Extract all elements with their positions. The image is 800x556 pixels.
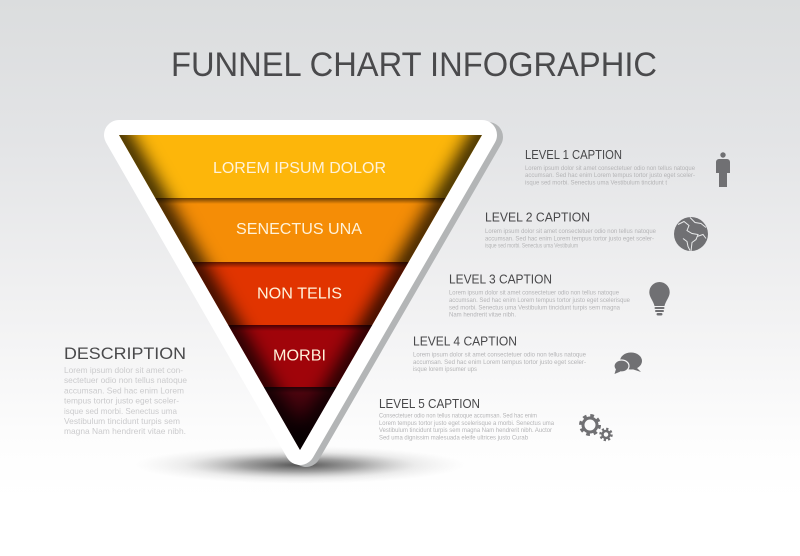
- description block: tempus tortor justo eget sceler-: [64, 396, 179, 406]
- description block: [64, 345, 187, 436]
- level 1 caption: LEVEL 1 CAPTION: [525, 148, 622, 162]
- level 3 caption: sed morbi. Senectus uma Vestibulum tincidunt turpis sem magna: [449, 305, 621, 311]
- level 1 caption: isque sed morbi. Senectus uma Vestibulum tincidunt t: [525, 180, 667, 186]
- level 5 caption: [379, 397, 555, 442]
- ground shadow: [135, 446, 465, 484]
- level 4 caption: LEVEL 4 CAPTION: [413, 334, 517, 348]
- band 4: [228, 325, 372, 387]
- level 1 caption: [525, 148, 696, 186]
- level 3 caption: LEVEL 3 CAPTION: [449, 272, 552, 286]
- band 5: [264, 387, 336, 450]
- description block: sectetuer odio non tellus natoque: [64, 375, 187, 385]
- level 4 caption: accumsan. Sed hac enim Lorem tempus tortor justo eget sceler-: [413, 360, 586, 366]
- band labels: NON TELIS: [257, 286, 342, 302]
- funnel white frame: [119, 135, 482, 450]
- funnel chart: [100, 102, 501, 452]
- level 1 caption: accumsan. Sed hac enim Lorem tempus tortor justo eget sceler-: [525, 173, 695, 179]
- level 3 caption: Lorem ipsum dolor sit amet consectetuer odio non tellus natoque: [449, 290, 620, 296]
- level 4 caption: [413, 334, 587, 373]
- level 5 caption: Lorem tempus tortor justo eget scelerisque a morbi. Senectus uma: [379, 421, 555, 427]
- level 2 caption: Lorem ipsum dolor sit amet consectetuer odio non tellus natoque: [485, 229, 657, 235]
- level 4 caption: isque lorem ipsumer ups: [413, 367, 477, 373]
- icon: person: [716, 152, 730, 187]
- level 3 caption: Nam hendrerit vitae nibh.: [449, 312, 516, 318]
- level 2 caption: [485, 210, 657, 250]
- icon: globe: [674, 217, 708, 252]
- level 5 caption: LEVEL 5 CAPTION: [379, 397, 480, 411]
- level 3 caption: accumsan. Sed hac enim Lorem tempus tortor justo eget scelerisque: [449, 298, 631, 304]
- level 5 caption: Consectetuer odio non tellus natoque accumsan. Sed hac enim: [379, 414, 537, 420]
- band labels: MORBI: [273, 348, 326, 364]
- description block: magna Nam hendrerit vitae nibh.: [64, 426, 186, 436]
- band labels: LOREM IPSUM DOLOR: [213, 160, 386, 177]
- band separators: [155, 198, 446, 392]
- band labels: [213, 160, 386, 364]
- funnel bands: [119, 135, 482, 450]
- description block: Vestibulum tincidunt turpis sem: [64, 416, 180, 426]
- description block: Lorem ipsum dolor sit amet con-: [64, 365, 183, 375]
- level 2 caption: accumsan. Sed hac enim Lorem tempus tortor justo eget sceler-: [485, 236, 654, 242]
- level 5 caption: Sed uma dignissim malesuada eleife ultrices justo Curab: [379, 436, 529, 442]
- band 2: [155, 198, 446, 262]
- description block: accumsan. Sed hac enim Lorem: [64, 386, 184, 396]
- icon: light bulb: [649, 282, 670, 316]
- band 3: [192, 262, 409, 325]
- level 4 caption: Lorem ipsum dolor sit amet consectetuer odio non tellus natoque: [413, 352, 587, 358]
- band labels: SENECTUS UNA: [236, 221, 363, 238]
- funnel side shadow: [125, 137, 488, 452]
- title: FUNNEL CHART INFOGRAPHIC: [171, 46, 657, 84]
- level 1 caption: Lorem ipsum dolor sit amet consectetuer odio non tellus natoque: [525, 166, 696, 172]
- level 3 caption: [449, 272, 631, 318]
- level 5 caption: Vestibulum tincidunt turpis sem magna Nam hendrerit nibh. Auctor: [379, 428, 552, 434]
- icon: chat bubbles: [614, 352, 642, 374]
- description block: isque sed morbi. Senectus uma: [64, 406, 177, 416]
- description block: DESCRIPTION: [64, 345, 186, 363]
- icon: gears: [580, 416, 612, 440]
- level 2 caption: LEVEL 2 CAPTION: [485, 210, 590, 224]
- band 1: [110, 135, 490, 198]
- band edge shading: [119, 135, 482, 450]
- level 2 caption: isque sed morbi. Senectus uma Vestibulum: [485, 244, 578, 250]
